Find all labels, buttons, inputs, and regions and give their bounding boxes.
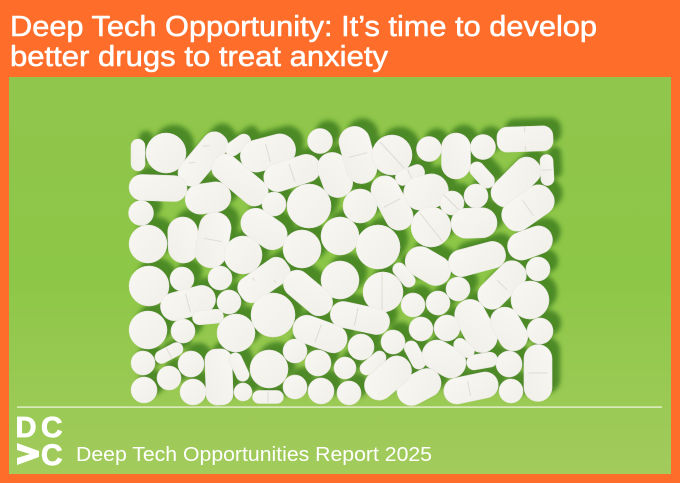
report name: Deep Tech Opportunities Report 2025 xyxy=(76,443,432,466)
logo: DCVC: C xyxy=(41,439,62,472)
logo: DCVC xyxy=(16,412,63,472)
logo: DCVC: D xyxy=(16,412,36,444)
title: better drugs to treat anxiety xyxy=(10,41,389,73)
title xyxy=(10,11,597,73)
logo: DCVC: C xyxy=(41,412,63,444)
photo: white pills arranged in a rectangle xyxy=(128,123,560,411)
title: Deep Tech Opportunity: It’s time to develop xyxy=(10,11,597,43)
divider line xyxy=(17,406,662,408)
